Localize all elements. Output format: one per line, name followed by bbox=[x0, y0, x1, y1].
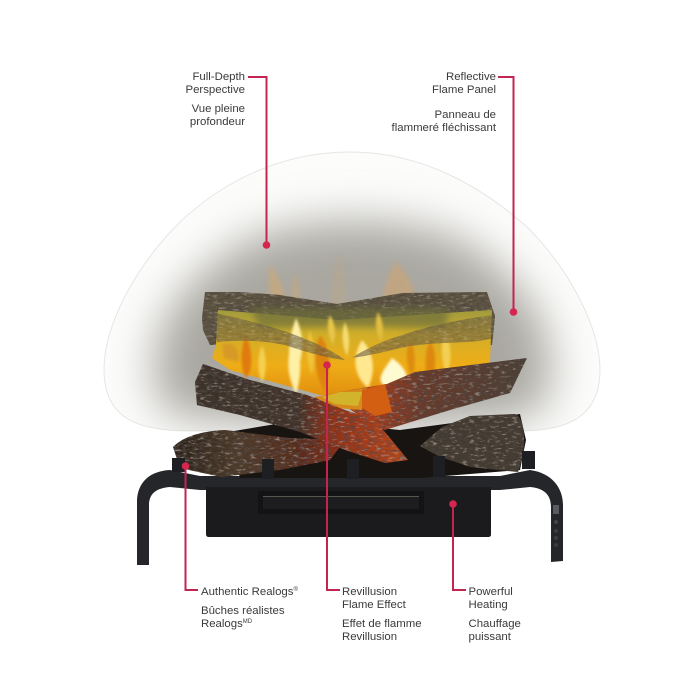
infographic: electric log set with callouts bbox=[104, 72, 600, 642]
heater grille bbox=[258, 491, 424, 514]
callout: full-depth perspective: profondeur bbox=[190, 116, 245, 128]
heater box bbox=[206, 487, 491, 537]
control panel bbox=[553, 505, 559, 547]
callout: authentic realogs: ® bbox=[293, 586, 298, 593]
callout: full-depth perspective: Full-Depth bbox=[192, 71, 245, 83]
callout: powerful heating: Heating bbox=[468, 599, 508, 611]
callout: full-depth perspective: Perspective bbox=[185, 84, 245, 96]
callout: authentic realogs: Bûches réalistes bbox=[201, 605, 285, 617]
reflected flames above logs bbox=[269, 255, 416, 310]
callout: revillusion flame effect: Revillusion bbox=[342, 631, 397, 643]
bottom left log bbox=[173, 430, 345, 477]
callout: revillusion flame effect: Flame Effect bbox=[342, 599, 407, 611]
front left log bbox=[195, 364, 408, 463]
callout: revillusion flame effect: Effet de flamme bbox=[342, 618, 422, 630]
callout: authentic realogs bbox=[182, 462, 298, 630]
callout: authentic realogs: Authentic Realogs bbox=[201, 586, 293, 598]
callout: reflective flame panel: Flame Panel bbox=[432, 84, 496, 96]
callout: authentic realogs: Realogs bbox=[201, 618, 243, 630]
callout: powerful heating: puissant bbox=[468, 631, 512, 643]
log retaining clips bbox=[172, 451, 535, 479]
callout: powerful heating: Chauffage bbox=[468, 618, 521, 630]
callout: powerful heating bbox=[449, 500, 521, 643]
callout: reflective flame panel: Reflective bbox=[446, 71, 496, 83]
dark backing under crossed logs bbox=[228, 414, 526, 478]
reflected V logs bbox=[214, 313, 495, 360]
callout: reflective flame panel: Panneau de bbox=[435, 109, 496, 121]
callout: full-depth perspective: Vue pleine bbox=[192, 103, 245, 115]
flames bbox=[222, 312, 451, 395]
callout: reflective flame panel bbox=[392, 71, 517, 316]
callout: powerful heating: Powerful bbox=[468, 586, 513, 598]
callout: authentic realogs: MD bbox=[243, 619, 253, 625]
fire panel glow bbox=[212, 308, 492, 395]
callout: full-depth perspective bbox=[185, 71, 270, 249]
bottom right log bbox=[420, 414, 524, 472]
front right log bbox=[313, 358, 527, 430]
back log bbox=[202, 292, 495, 345]
callout: revillusion flame effect bbox=[323, 361, 422, 643]
glowing embers bbox=[315, 384, 392, 416]
reflective flame panel bbox=[104, 152, 600, 431]
callout: reflective flame panel: flammeré fléchissant bbox=[392, 122, 497, 134]
stand rail and legs bbox=[137, 470, 563, 565]
callout: revillusion flame effect: Revillusion bbox=[342, 586, 397, 598]
